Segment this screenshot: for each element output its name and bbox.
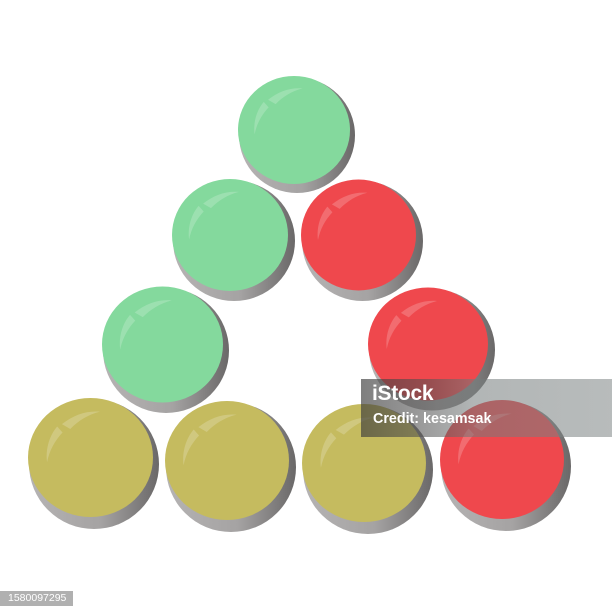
image id label: 1580097295 — [8, 592, 66, 604]
ball: green second row — [172, 179, 295, 301]
ball: olive bottom first — [28, 398, 159, 529]
ball: green top — [238, 76, 355, 193]
ball: red bottom right — [440, 400, 571, 531]
ball: olive bottom second — [165, 401, 296, 532]
image id label — [0, 591, 73, 606]
ball: olive bottom third — [302, 404, 433, 534]
watermark band — [361, 379, 612, 437]
watermark credit text: Credit: kesamsak — [373, 411, 491, 427]
ball: red third row — [368, 288, 495, 410]
ball: green third row — [102, 286, 229, 413]
ball: red second row — [301, 180, 423, 301]
watermark logo text: iStock — [372, 382, 433, 405]
